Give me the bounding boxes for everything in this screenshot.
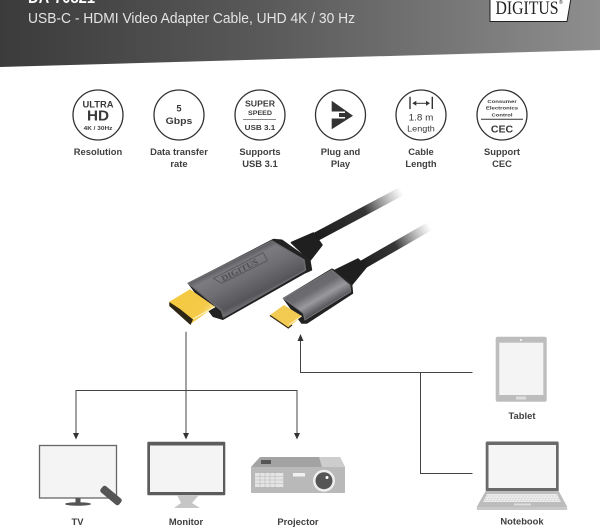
feature: data transfer rate [150,90,208,169]
feature icons row [73,90,527,169]
feature: resolution: Resolution [74,146,122,157]
feature: plug and play: Plug and [321,146,361,157]
device: notebook: Notebook [500,516,544,526]
feature: CEC: Electronics [486,106,519,111]
header banner [0,0,600,67]
device: notebook [477,442,567,526]
feature: CEC: Consumer [487,99,517,104]
connector arrows: inputs [298,334,472,474]
feature: resolution: HD [87,108,109,125]
feature: CEC: CEC [492,158,512,169]
HDMI gold plug [169,289,215,325]
device: monitor [147,442,225,527]
feature: cable length: 1.8 m [409,113,433,124]
device: projector [251,457,345,527]
subtitle: USB-C - HDMI Video Adapter Cable, UHD 4K / 30 Hz [28,10,355,27]
cable: USB-C side [350,226,430,272]
USB-C strain relief [336,259,366,284]
cable: HDMI side [310,191,402,240]
feature: CEC: Support [484,146,520,157]
device: projector: Projector [277,516,319,527]
feature: USB 3.1: SPEED [248,110,272,117]
logo: Digitus: ® [559,0,563,6]
USB-C gold plug [270,305,302,328]
feature: data transfer rate: Data transfer [150,146,208,157]
feature: USB 3.1: Supports [239,146,281,157]
feature: data transfer rate: 5 [176,104,182,114]
HDMI strain relief [292,233,322,260]
connector arrows: outputs [73,332,300,440]
feature: CEC: CEC [491,124,514,136]
device: tablet [496,337,547,421]
HDMI to USB-C adapter cable [169,191,430,328]
icon: remote [99,485,123,506]
feature: plug and play: Play [331,158,351,169]
feature: USB 3.1 [235,90,285,169]
HDMI housing: DIGITUS [220,256,260,283]
feature: cable length: Length [405,158,437,169]
feature: data transfer rate: rate [170,158,188,169]
feature: plug and play [316,90,366,169]
feature: USB 3.1: USB 3.1 [242,158,278,169]
feature: data transfer rate: Gbps [166,116,192,126]
feature: cable length: Length [407,124,435,134]
feature: USB 3.1: SUPER [245,100,275,109]
feature: resolution [73,90,123,157]
device: monitor: Monitor [169,516,204,527]
feature: USB 3.1: USB 3.1 [245,123,275,132]
feature: CEC [477,90,527,169]
feature: cable length: Cable [408,146,434,157]
HDMI housing [188,239,312,320]
feature: CEC: Control [492,112,512,117]
device: tablet: Tablet [509,410,535,421]
feature: resolution: ULTRA [82,99,114,109]
device: TV [40,446,123,527]
USB-C housing [283,269,353,323]
device: TV: TV [72,516,84,527]
feature: resolution: 4K / 30Hz [84,126,113,132]
feature: cable length [396,90,446,169]
